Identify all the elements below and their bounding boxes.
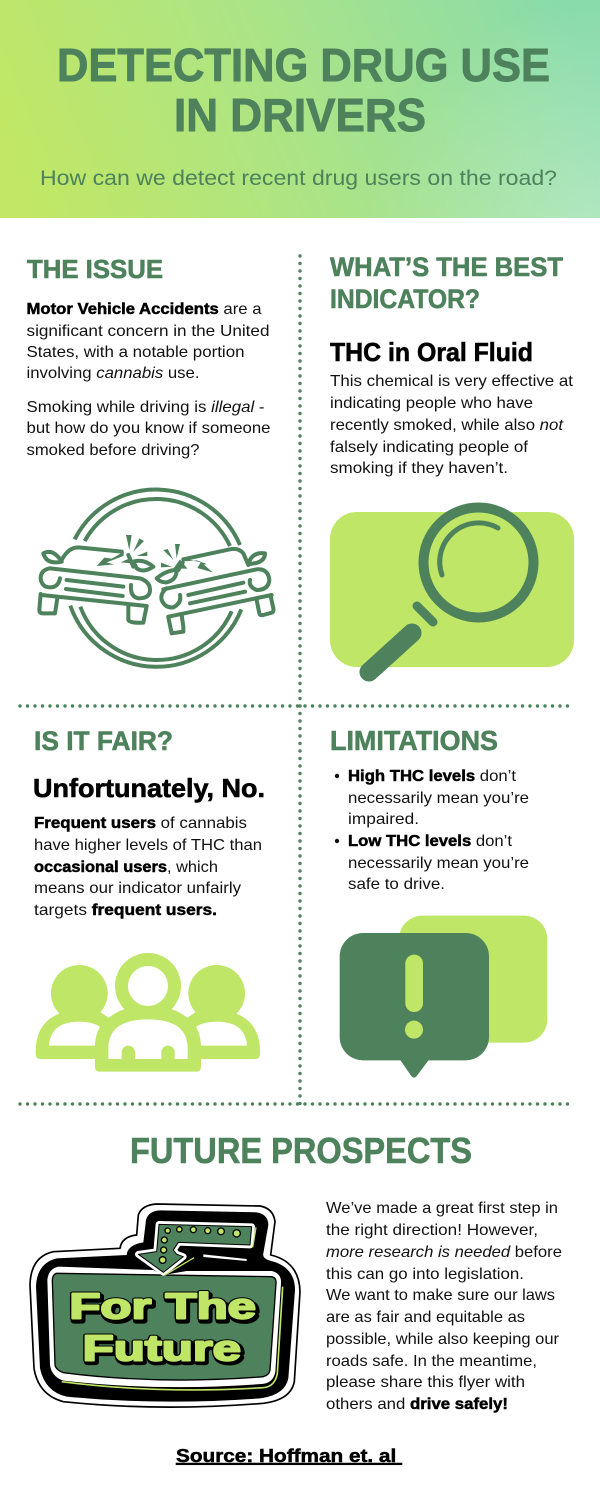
title: IN DRIVERS [174, 89, 426, 141]
sign lettering: Future [83, 1327, 241, 1368]
subheading: thc in oral fluid: THC in Oral Fluid [330, 337, 533, 367]
heading: limitations: LIMITATIONS [330, 725, 498, 756]
icon: warning speech bubbles [340, 916, 547, 1078]
title [57, 39, 550, 141]
heading: is it fair: IS IT FAIR? [34, 726, 173, 756]
text block: frequent users: targets frequent users. [34, 902, 217, 919]
text block: future prospects: roads safe. In the meantime, [326, 1353, 537, 1370]
text block: future prospects: We’ve made a great first step in [326, 1200, 558, 1217]
text block: the issue: States, with a notable portion [26, 344, 244, 361]
heading: the issue: THE ISSUE [27, 254, 163, 284]
text block: future prospects: We want to make sure our laws [326, 1287, 555, 1304]
text block: frequent users: Frequent users of cannabis [34, 815, 247, 832]
text block: thc [330, 373, 574, 477]
text block: the issue: significant concern in the United [26, 323, 270, 340]
bullet list: safe to drive. [348, 876, 445, 893]
bullet list: Low THC levels don’t [348, 833, 513, 850]
heading: future prospects: FUTURE PROSPECTS [130, 1130, 472, 1171]
sign lettering: For The [69, 1286, 256, 1327]
text block: thc: smoking if they haven’t. [330, 460, 508, 477]
text block: the issue: smoked before driving? [26, 442, 200, 459]
panel: best indicator [330, 252, 574, 672]
text block: future prospects: please share this flyer with [326, 1374, 525, 1391]
panel: is it fair [33, 726, 265, 1072]
subtitle: How can we detect recent drug users on the road? [40, 167, 557, 190]
source citation: Source: Hoffman et. al [176, 1446, 402, 1466]
header banner [0, 0, 600, 218]
title: DETECTING DRUG USE [57, 39, 550, 91]
text block: the issue: Smoking while driving is illegal - [26, 399, 264, 416]
text block: future prospects [326, 1200, 562, 1413]
text block: thc: recently smoked, while also not [330, 417, 564, 434]
sign lettering: For The [71, 1288, 258, 1329]
text block: frequent users: occasional users, which [34, 859, 218, 876]
text block: frequent users: means our indicator unfairly [34, 880, 241, 897]
text block: future prospects: this can go into legislation. [326, 1266, 524, 1283]
panel: the issue [26, 254, 273, 667]
text block: the issue: involving cannabis use. [26, 365, 200, 382]
bullet list: High THC levels don’t [348, 768, 517, 785]
heading: best indicator [330, 252, 563, 314]
heading: best indicator: WHAT’S THE BEST [330, 252, 563, 282]
horizontal dotted divider: middle [20, 704, 573, 708]
text block: frequent users [34, 815, 262, 919]
heading: best indicator: INDICATOR? [330, 284, 480, 314]
text block: the issue [26, 301, 271, 459]
text block: the issue: Motor Vehicle Accidents are a [26, 301, 262, 318]
text block: future prospects: possible, while also keeping our [326, 1331, 560, 1348]
text block: thc: This chemical is very effective at [330, 373, 574, 390]
bullet list: necessarily mean you’re [348, 790, 529, 807]
sign lettering: Future [84, 1330, 243, 1371]
bullet list [335, 768, 529, 893]
sign lettering [69, 1286, 258, 1371]
bullet list: necessarily mean you’re [348, 855, 529, 872]
vertical dotted divider [298, 256, 302, 1104]
arrow [138, 1224, 256, 1275]
text block: future prospects: the right direction! However, [326, 1222, 538, 1239]
icon: for the future sign [30, 1204, 300, 1407]
icon: magnifying glass [330, 508, 574, 672]
text block: future prospects: are as fair and equitable as [326, 1309, 525, 1326]
sign lettering: For The [69, 1286, 256, 1327]
panel: limitations [330, 725, 547, 1078]
text block: future prospects: more research is needed before [326, 1244, 562, 1261]
text block: thc: indicating people who have [330, 395, 533, 412]
text block: the issue: but how do you know if someone [26, 420, 271, 437]
icon: group of people [36, 953, 260, 1072]
text block: thc: falsely indicating people of [330, 439, 529, 456]
bullet list: impaired. [348, 811, 419, 828]
subheading: unfortunately no: Unfortunately, No. [33, 773, 265, 803]
text block: frequent users: have higher levels of THC than [34, 837, 262, 854]
sign lettering: Future [83, 1327, 241, 1368]
icon: car crash [39, 490, 273, 667]
text block: future prospects: others and drive safely! [326, 1396, 508, 1413]
horizontal dotted divider: bottom [20, 1102, 573, 1106]
